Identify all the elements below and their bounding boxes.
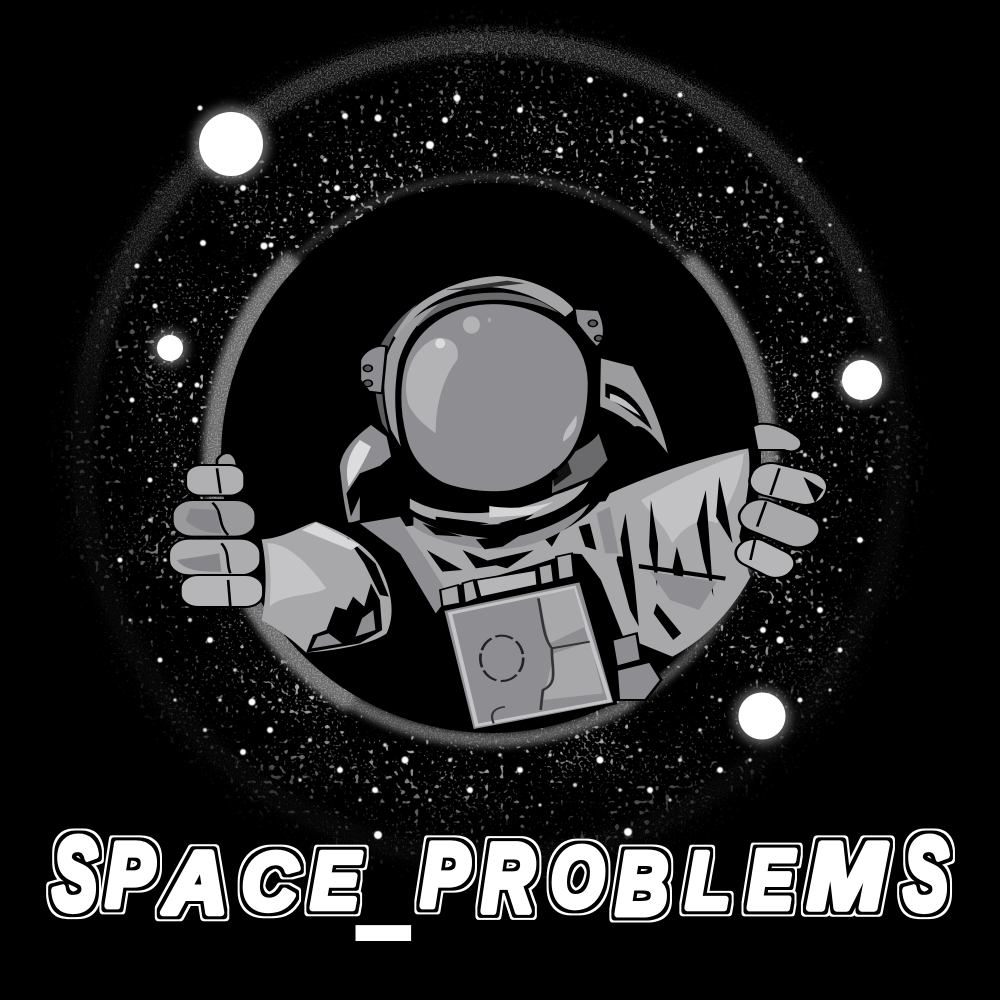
- astronaut: [169, 272, 833, 731]
- bright stars: [118, 77, 873, 839]
- right hand: [729, 424, 833, 583]
- arm: left: [262, 522, 392, 653]
- title: S: [904, 818, 948, 932]
- planet: upper left: [193, 106, 269, 182]
- helmet visor: [399, 303, 590, 497]
- back pack: left: [338, 403, 404, 527]
- back pack: right: [596, 355, 673, 473]
- title: M: [808, 824, 887, 928]
- neck collar: [404, 457, 611, 549]
- planet: lower right: [734, 688, 790, 744]
- title: C: [242, 836, 298, 927]
- star field: [52, 11, 928, 879]
- title: S: [53, 818, 97, 932]
- title: O: [551, 831, 604, 925]
- title: [53, 818, 948, 945]
- small stars: [108, 93, 886, 807]
- side canister: [612, 633, 661, 700]
- planet: left: [152, 330, 188, 366]
- suit shoulder straps: [360, 500, 623, 613]
- title: B: [616, 835, 668, 934]
- title: E: [311, 837, 361, 926]
- title: E: [748, 834, 796, 927]
- arm: right: [579, 448, 750, 657]
- torso: [342, 490, 730, 731]
- chest control box: [442, 581, 615, 731]
- title: R: [482, 824, 534, 931]
- title: _: [360, 834, 409, 945]
- planet: right: [838, 356, 886, 404]
- black hole rim: [198, 170, 782, 752]
- black hole: [221, 183, 761, 733]
- title: A: [163, 836, 227, 932]
- helmet shell: [360, 272, 608, 505]
- title: L: [686, 837, 730, 926]
- title: P: [421, 825, 470, 926]
- left hand: [169, 453, 263, 607]
- nebula ring: [70, 24, 910, 870]
- title: P: [106, 825, 155, 926]
